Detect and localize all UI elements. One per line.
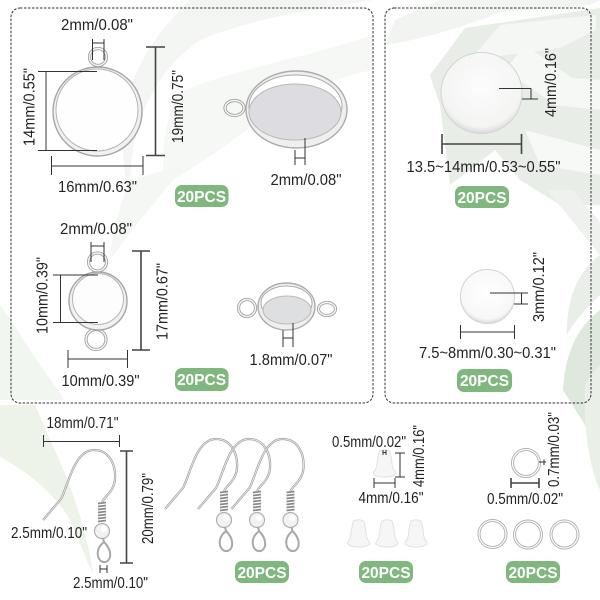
icon: ear hook single xyxy=(43,450,115,562)
badge: ear nut quantity: 20PCS xyxy=(361,565,411,582)
dimension: connector total height: 17mm/0.67" xyxy=(155,263,172,340)
dimension: cabochon large thickness: 4mm/0.16" xyxy=(543,48,560,117)
icon: large glass cabochon xyxy=(441,52,522,134)
dimension: large pendant total height: 19mm/0.75" xyxy=(170,70,187,143)
dimension: cabochon small thickness: 3mm/0.12" xyxy=(531,252,548,322)
dimension: ear nut height: 4mm/0.16" xyxy=(411,425,428,487)
dimension: large pendant ring width: 2mm/0.08" xyxy=(61,17,133,34)
badge: jump ring quantity: 20PCS xyxy=(508,565,558,582)
dimension: hook height: 20mm/0.79" xyxy=(140,473,157,544)
icon: jump ring single xyxy=(512,450,540,476)
dimension: large pendant width xyxy=(52,156,143,196)
dimension: connector inner height xyxy=(35,257,98,334)
icon: large pendant tray front xyxy=(53,48,142,156)
badge: connector quantity xyxy=(175,368,228,391)
panel: glass cabochons xyxy=(385,8,591,403)
dimension: connector ring width xyxy=(60,221,132,262)
dimension: ear nut height xyxy=(395,425,428,487)
dimension: connector total height xyxy=(132,251,172,350)
icon: three jump rings xyxy=(479,520,578,548)
dimension: cabochon large thickness xyxy=(499,48,560,117)
dimension: hook wire end: 2.5mm/0.10" xyxy=(11,525,87,542)
dimension: large pendant ring width xyxy=(61,17,133,60)
icon: small connector tray front xyxy=(69,253,127,350)
badge: small cabochon quantity xyxy=(457,369,512,392)
dimension: hook height xyxy=(120,451,157,563)
dimension: large pendant inner height: 14mm/0.55" xyxy=(22,68,38,146)
dimension: large pendant width: 16mm/0.63" xyxy=(58,179,137,196)
dimension: hook loop: 2.5mm/0.10" xyxy=(73,575,148,592)
dimension: ear nut top: 0.5mm/0.02" xyxy=(332,434,406,451)
icon: small connector tray angled xyxy=(238,283,336,330)
dimension: connector width: 10mm/0.39" xyxy=(62,373,140,390)
dimension: hook loop xyxy=(73,565,148,592)
badge: small cabochon quantity: 20PCS xyxy=(460,373,509,390)
dimension: connector ring width: 2mm/0.08" xyxy=(60,221,132,238)
icon: large pendant tray angled xyxy=(225,71,347,148)
icon: three ear hooks xyxy=(165,439,304,551)
dimension: large pendant total height xyxy=(146,47,187,156)
dimension: connector tray depth xyxy=(250,323,332,369)
icon: three ear nuts xyxy=(347,520,427,547)
dimension: jump ring width: 0.5mm/0.02" xyxy=(487,491,563,508)
panel: pendant trays xyxy=(11,8,373,403)
badge: connector quantity: 20PCS xyxy=(177,372,226,389)
dimension: jump ring wire: 0.7mm/0.03" xyxy=(546,412,563,487)
icon: ear nut single xyxy=(373,450,396,477)
dimension: large tray depth: 2mm/0.08" xyxy=(270,172,342,189)
dimension: large tray depth xyxy=(270,138,342,189)
dimension: hook width xyxy=(44,415,120,447)
dimension: cabochon small width: 7.5~8mm/0.30~0.31" xyxy=(419,345,556,362)
dimension: ear nut width: 4mm/0.16" xyxy=(358,490,424,507)
dimension: connector width xyxy=(62,350,140,390)
dimension: connector tray depth: 1.8mm/0.07" xyxy=(250,352,332,369)
dimension: jump ring width xyxy=(487,478,563,508)
badge: large cabochon quantity: 20PCS xyxy=(457,190,507,207)
dimension: cabochon large width: 13.5~14mm/0.53~0.55" xyxy=(406,159,560,176)
dimension: large pendant inner height xyxy=(22,68,97,150)
dimension: ear nut width xyxy=(358,478,424,507)
badge: ear hook quantity: 20PCS xyxy=(237,565,287,582)
dimension: connector inner height: 10mm/0.39" xyxy=(35,257,52,334)
icon: small glass cabochon xyxy=(460,270,514,324)
badge: pendant large quantity: 20PCS xyxy=(177,189,226,206)
dimension: jump ring wire xyxy=(539,412,563,487)
dimension: cabochon large width xyxy=(406,134,560,176)
dimension: cabochon small thickness xyxy=(490,252,548,322)
dimension: hook width: 18mm/0.71" xyxy=(46,415,118,432)
dimension: cabochon small width xyxy=(419,325,556,362)
